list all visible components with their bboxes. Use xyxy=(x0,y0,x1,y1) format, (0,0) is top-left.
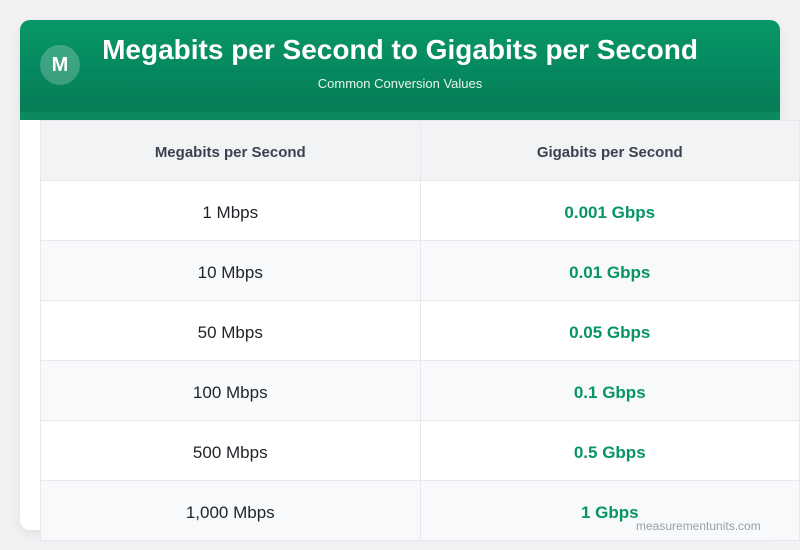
header xyxy=(20,20,780,120)
conversion table: 0.01 Gbps xyxy=(569,262,650,282)
title: Megabits per Second to Gigabits per Second xyxy=(102,34,698,65)
conversion table: 0.1 Gbps xyxy=(574,382,646,402)
subtitle: Common Conversion Values xyxy=(318,76,482,91)
conversion table: Megabits per Second xyxy=(155,144,306,161)
watermark: measurementunits.com xyxy=(636,519,761,533)
conversion table: 1 Mbps xyxy=(202,202,258,222)
icon: M badge xyxy=(40,45,80,85)
conversion table: Gigabits per Second xyxy=(537,144,683,161)
conversion table: 10 Mbps xyxy=(198,262,263,282)
conversion table xyxy=(40,120,800,541)
conversion table: 0.5 Gbps xyxy=(574,442,646,462)
conversion table: 100 Mbps xyxy=(193,382,268,402)
conversion table: 0.001 Gbps xyxy=(564,202,655,222)
icon: M badge: M xyxy=(52,54,68,76)
conversion table: 500 Mbps xyxy=(193,442,268,462)
conversion table: 1 Gbps xyxy=(581,502,639,522)
conversion table: 50 Mbps xyxy=(198,322,263,342)
conversion table: 0.05 Gbps xyxy=(569,322,650,342)
conversion table: 1,000 Mbps xyxy=(186,502,275,522)
